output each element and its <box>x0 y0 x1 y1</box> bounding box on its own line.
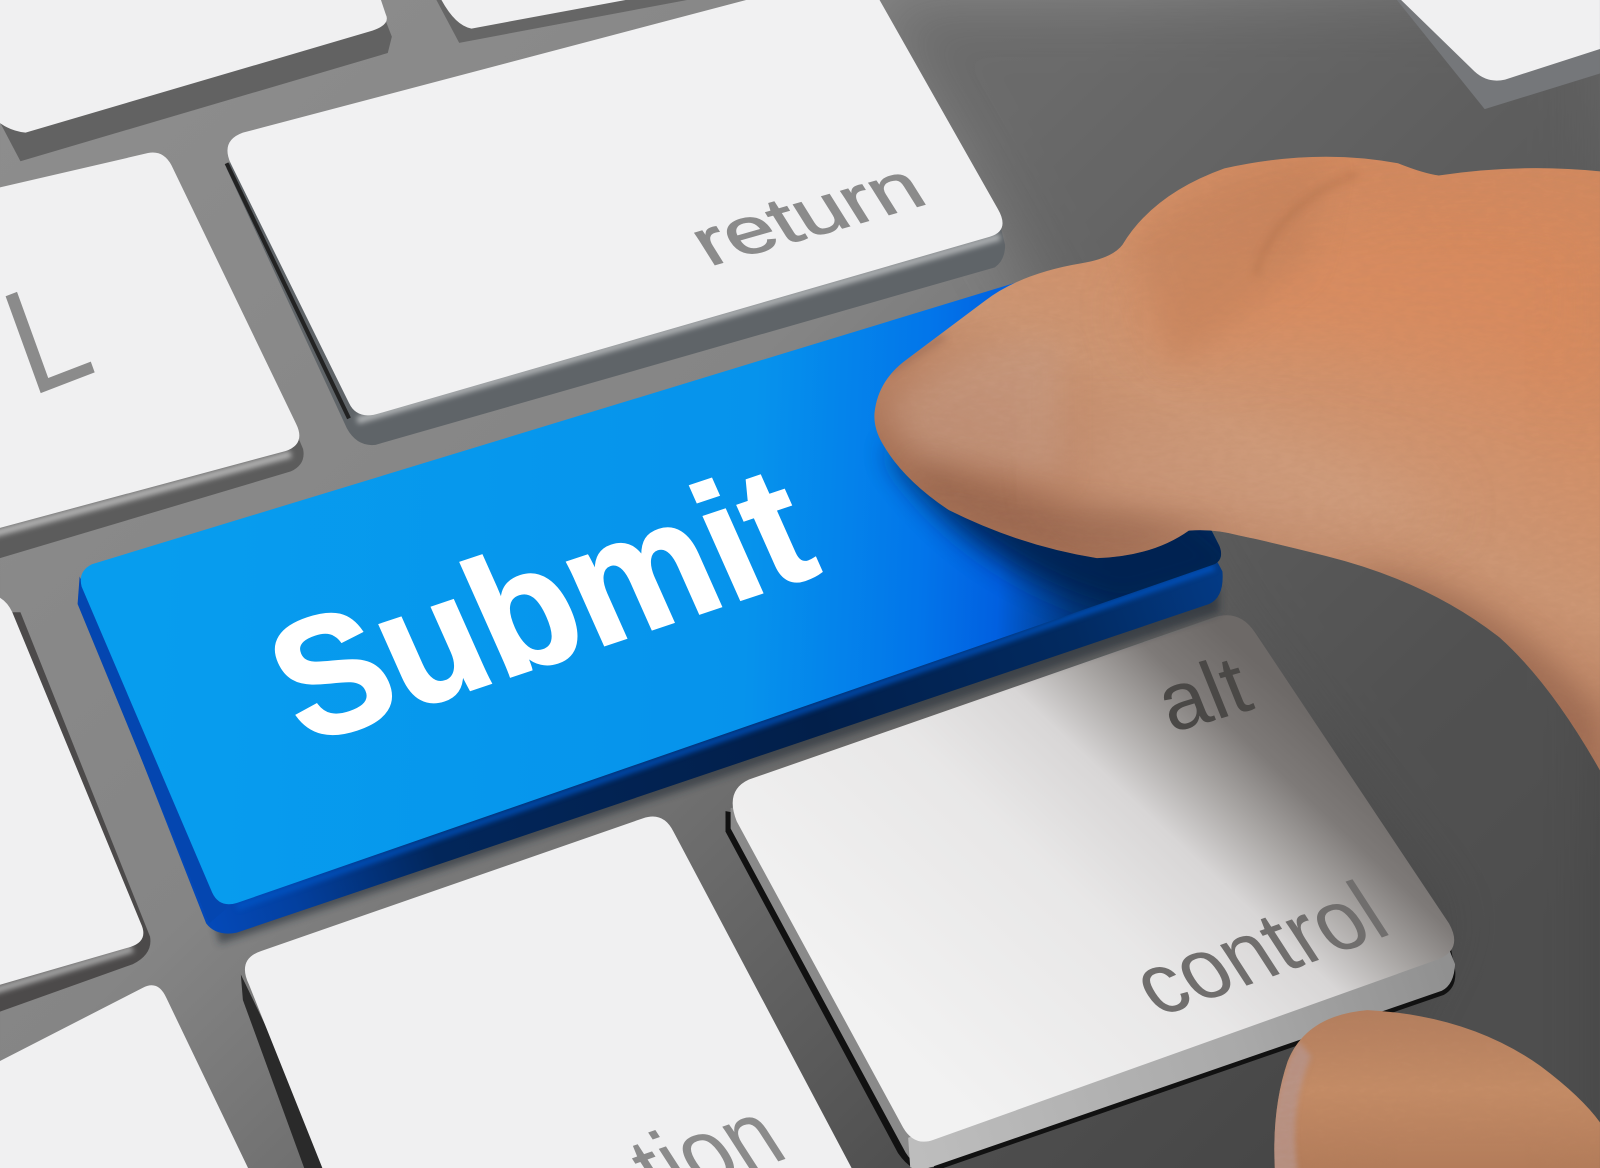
key: bottom left <box>0 985 253 1168</box>
orange upper tone <box>1133 214 1600 408</box>
finger shadow on key <box>888 449 1265 612</box>
submit key side highlight <box>237 567 1214 907</box>
knuckle tone <box>1152 182 1308 338</box>
key: return <box>227 0 1005 445</box>
label: alt: alt <box>1143 638 1263 749</box>
control key left side <box>731 806 949 1167</box>
key: bottom middle <box>241 816 857 1168</box>
knuckle crease <box>1258 174 1352 263</box>
pale middle tone <box>1070 436 1346 550</box>
key: top right <box>1393 0 1600 109</box>
thumb <box>1269 1005 1600 1168</box>
submit key left edge <box>78 577 227 923</box>
key: left middle <box>0 594 150 1015</box>
thumb texture <box>1270 1005 1600 1168</box>
shadow under submit key <box>209 587 1219 944</box>
submit key <box>78 275 1265 934</box>
skin texture <box>867 153 1600 786</box>
key: top middle <box>434 0 714 43</box>
control key bottom side <box>908 949 1455 1168</box>
fingertip shade <box>931 471 1200 555</box>
key: top left <box>0 0 392 161</box>
key: control / alt <box>726 615 1455 1168</box>
nail edge shadow <box>888 337 944 372</box>
label: control: control <box>1113 864 1405 1034</box>
thumb nail strip <box>1269 1041 1311 1168</box>
dark lower tone <box>1369 565 1600 768</box>
finger <box>867 153 1600 796</box>
control key top face <box>733 615 1454 1142</box>
base shading right <box>867 0 1600 1168</box>
control key outline shadow <box>726 811 1455 1168</box>
label: return: return <box>675 149 938 279</box>
submit key side <box>80 556 1223 934</box>
submit key top face <box>81 275 1221 904</box>
pale fingertip tone <box>888 343 1061 480</box>
label: Submit: Submit <box>242 431 839 779</box>
key: L <box>0 153 304 561</box>
